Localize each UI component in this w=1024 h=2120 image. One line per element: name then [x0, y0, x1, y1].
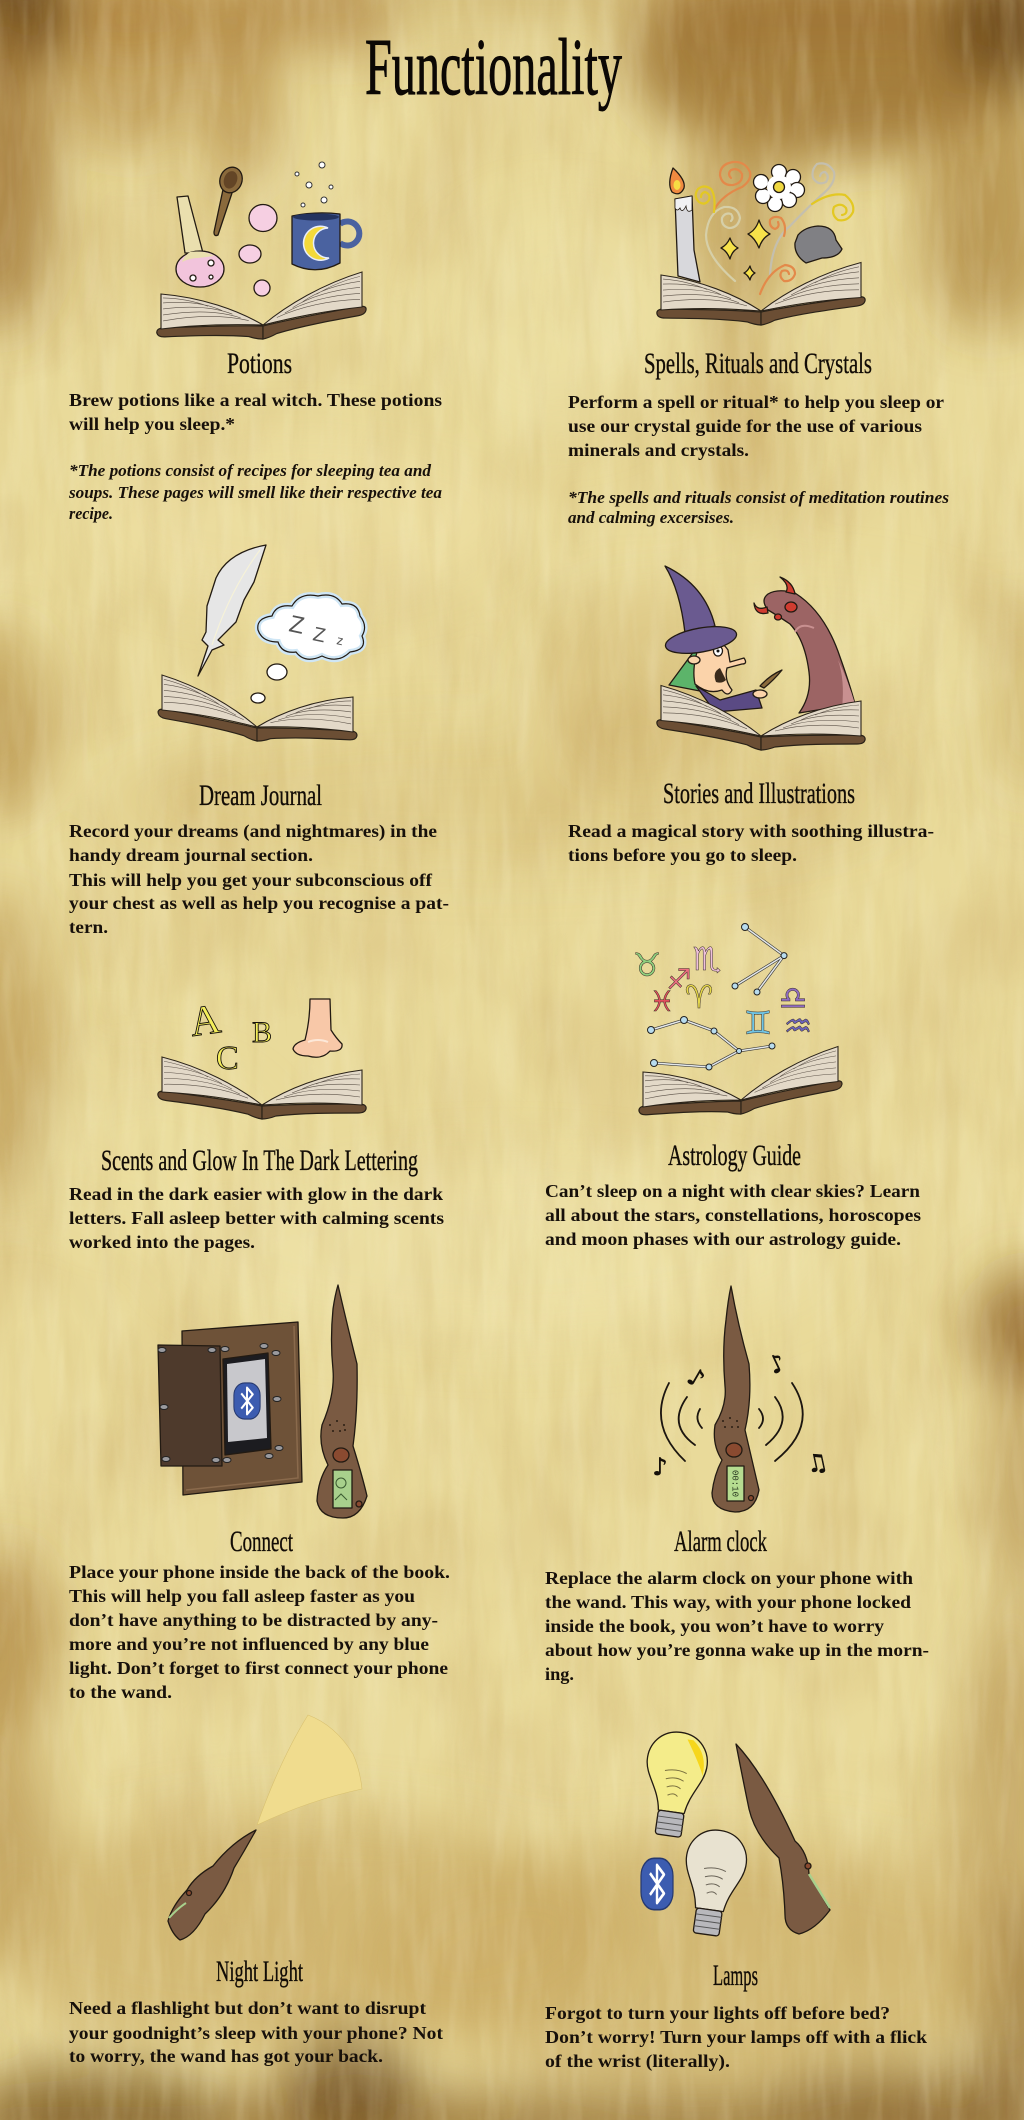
icon: stories illustration — [657, 566, 865, 750]
text block — [69, 390, 442, 434]
music notes: ♪ — [764, 1348, 790, 1380]
icon: scents illustration: C — [216, 1040, 239, 1077]
text block: This will help you get your subconscious off — [69, 870, 433, 890]
text block: minerals and crystals. — [568, 440, 749, 460]
footnote: soups. These pages will smell like their respective tea — [68, 483, 442, 502]
heading: Stories and Illustrations — [663, 777, 855, 810]
text block: worked into the pages. — [69, 1232, 255, 1252]
text block: Perform a spell or ritual* to help you sleep or — [568, 392, 944, 412]
panel: dream journal — [69, 545, 449, 937]
heading: Scents and Glow In The Dark Lettering — [101, 1144, 418, 1177]
zodiac symbols: ♈ — [685, 978, 713, 1016]
text block: Record your dreams (and nightmares) in the — [69, 821, 437, 842]
music notes: ♪ — [652, 1453, 668, 1481]
footnote: *The spells and rituals consist of meditation routines — [568, 488, 949, 507]
zodiac symbols: ♉ — [633, 946, 661, 984]
text block: Read in the dark easier with glow in the dark — [69, 1184, 443, 1204]
icon: lamps and wand — [637, 1728, 830, 1939]
bluetooth badge — [641, 1858, 673, 1910]
icon: dream journal illustration: z — [335, 632, 345, 648]
zodiac symbols: ♊ — [744, 1004, 772, 1042]
text block: don’t have anything to be distracted by any- — [69, 1610, 438, 1630]
icon: potions illustration — [157, 162, 366, 343]
icon: dream journal illustration: Z — [287, 610, 307, 640]
zodiac symbols: ♐ — [666, 963, 692, 996]
title: Functionality — [365, 24, 622, 112]
wand — [317, 1285, 367, 1518]
footnote: recipe. — [69, 504, 113, 523]
text block: Place your phone inside the back of the book. — [69, 1562, 450, 1582]
footnote — [68, 461, 442, 523]
music notes: ♫ — [804, 1447, 830, 1479]
text block: the wand. This way, with your phone locked — [545, 1592, 911, 1612]
text block: ing. — [545, 1664, 574, 1684]
heading: Night Light — [216, 1955, 303, 1988]
text block: Replace the alarm clock on your phone with — [545, 1568, 913, 1588]
icon: wand with alarm: 00:10 — [730, 1470, 740, 1497]
footnote: and calming excersises. — [568, 508, 734, 527]
text block: and moon phases with our astrology guide. — [545, 1229, 901, 1249]
zodiac symbols: ♏ — [693, 940, 721, 978]
icon: scents illustration: B — [252, 1016, 272, 1049]
text block: all about the stars, constellations, horoscopes — [545, 1205, 921, 1225]
text block: This will help you fall asleep faster as you — [69, 1586, 415, 1606]
icon: wand with light beam — [168, 1715, 362, 1940]
text block: Don’t worry! Turn your lamps off with a flick — [545, 2027, 927, 2047]
text block: more and you’re not influenced by any blue — [69, 1634, 429, 1654]
heading: Spells, Rituals and Crystals — [644, 347, 872, 380]
text block: Need a flashlight but don’t want to disrupt — [69, 1998, 426, 2018]
text block: Brew potions like a real witch. These potions — [69, 390, 442, 410]
panel: night light — [69, 1715, 443, 2066]
text block — [545, 1181, 921, 1249]
constellations — [648, 924, 787, 1070]
text block — [568, 392, 944, 460]
lit bulb — [637, 1728, 711, 1840]
icon: wand with alarm — [652, 1286, 830, 1512]
wand — [736, 1744, 830, 1934]
heading: Alarm clock — [674, 1525, 767, 1558]
footnote — [568, 488, 949, 527]
text block — [69, 1998, 443, 2066]
panel: connect — [69, 1285, 450, 1702]
text block: will help you sleep.* — [69, 414, 235, 434]
icon: spells illustration — [657, 162, 865, 325]
zodiac symbols — [633, 940, 812, 1045]
heading: Astrology Guide — [668, 1139, 801, 1172]
text block: tern. — [69, 917, 108, 937]
heading: Lamps — [713, 1959, 758, 1992]
text block: your goodnight’s sleep with your phone? Not — [69, 2023, 443, 2043]
zodiac symbols: ♎ — [779, 979, 807, 1017]
panel: spells, rituals and crystals — [568, 162, 949, 527]
sound waves — [661, 1383, 803, 1461]
text block: about how you’re gonna wake up in the morn- — [545, 1640, 929, 1660]
text block — [545, 1568, 929, 1684]
text block: Can’t sleep on a night with clear skies? Learn — [545, 1181, 920, 1201]
footnote: *The potions consist of recipes for sleeping tea and — [69, 461, 432, 480]
panel: potions — [68, 162, 442, 523]
music notes — [652, 1348, 830, 1481]
unlit bulb — [676, 1826, 750, 1939]
icon: scents illustration — [158, 996, 366, 1119]
icon: dream journal illustration: Z — [311, 623, 327, 647]
text block — [69, 1184, 444, 1252]
text block: to the wand. — [69, 1682, 172, 1702]
panel: lamps — [545, 1728, 927, 2072]
text block: to worry, the wand has got your back. — [69, 2046, 383, 2066]
text block — [568, 821, 934, 865]
zodiac symbols: ♓ — [649, 985, 675, 1018]
panel: scents and glow in the dark lettering — [69, 996, 444, 1252]
heading: Dream Journal — [199, 779, 322, 812]
text block: inside the book, you won’t have to worry — [545, 1616, 884, 1636]
text block — [545, 2003, 927, 2072]
text block: letters. Fall asleep better with calming scents — [69, 1208, 444, 1228]
icon: book with phone and wand — [158, 1285, 367, 1518]
heading: Connect — [230, 1525, 293, 1558]
text block: of the wrist (literally). — [545, 2051, 730, 2072]
text block: Forgot to turn your lights off before bed? — [545, 2003, 890, 2023]
text block: tions before you go to sleep. — [568, 845, 797, 865]
icon: scents illustration: A — [187, 996, 224, 1046]
music notes: ♪ — [682, 1362, 710, 1394]
text block: Read a magical story with soothing illustra- — [568, 821, 934, 841]
text block: light. Don’t forget to first connect your phone — [69, 1658, 448, 1678]
text block: your chest as well as help you recognise a pat- — [69, 893, 449, 913]
panel: astrology guide — [545, 924, 921, 1249]
text block — [69, 1562, 450, 1702]
text block: handy dream journal section. — [69, 845, 313, 865]
text block: use our crystal guide for the use of various — [568, 416, 922, 436]
zodiac symbols: ♒ — [784, 1007, 812, 1045]
panel: alarm clock — [545, 1286, 929, 1684]
panel: stories and illustrations — [568, 566, 934, 865]
heading: Potions — [227, 347, 292, 380]
icon: dream journal illustration — [158, 545, 365, 746]
text block — [69, 821, 449, 937]
icon: astrology illustration — [633, 924, 842, 1121]
